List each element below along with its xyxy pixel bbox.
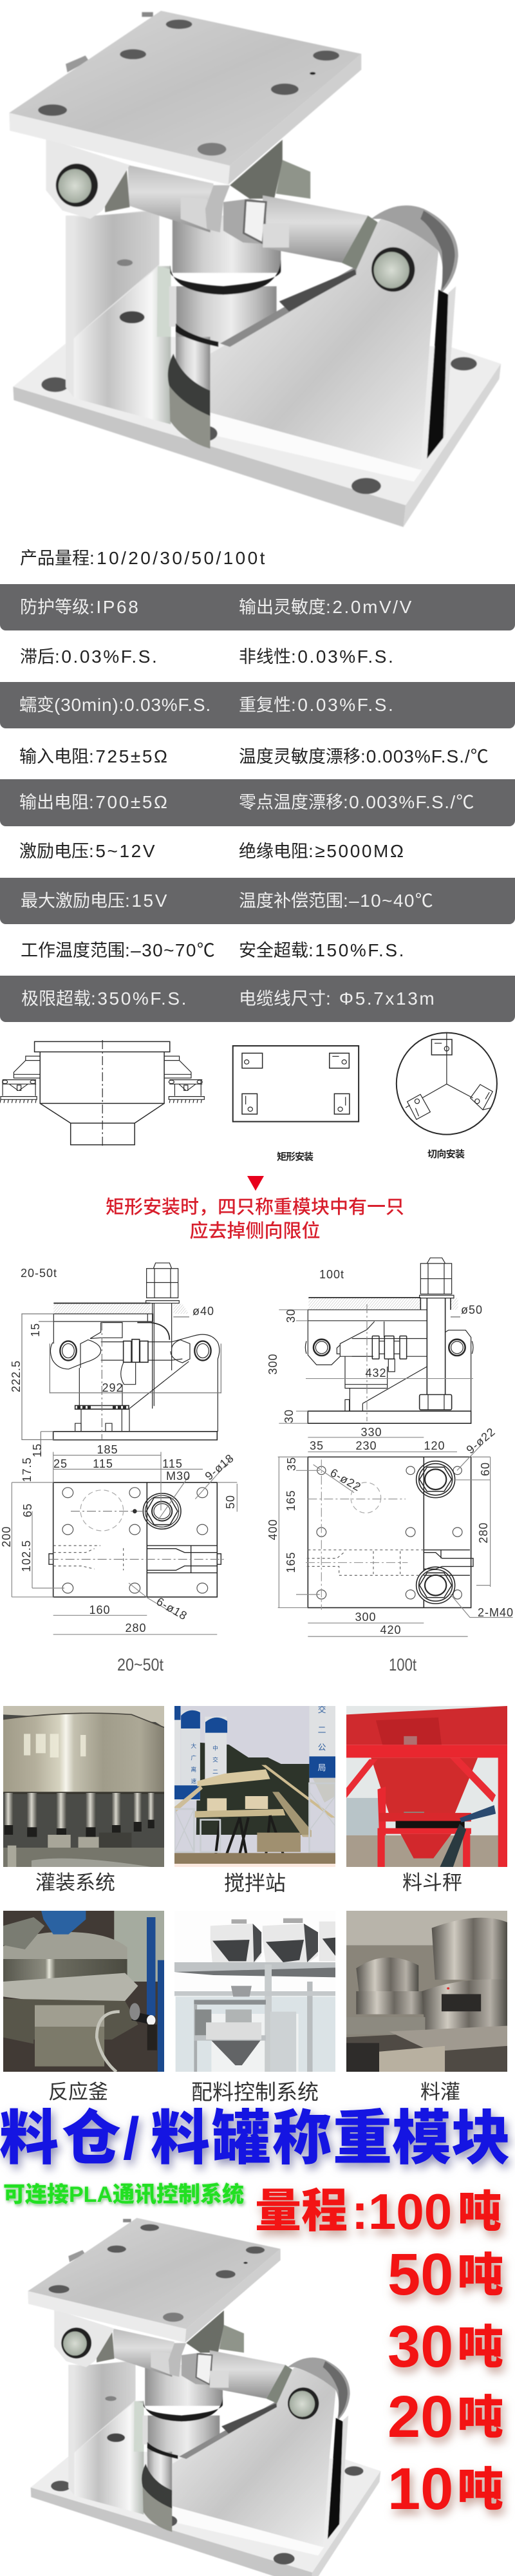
dimension values: 17.5 bbox=[21, 1457, 33, 1482]
dimension values: 300 bbox=[355, 1611, 377, 1624]
red installation note: 应去掉侧向限位 bbox=[189, 1220, 321, 1242]
photo: hopper scale bbox=[346, 1706, 507, 1867]
rectangular layout diagram bbox=[233, 1046, 359, 1122]
photo: mixing station bbox=[174, 1706, 335, 1867]
model label: 100t bbox=[319, 1268, 344, 1281]
capacity: 50 t: 吨 bbox=[457, 2250, 503, 2302]
dimension values: 292 bbox=[102, 1381, 124, 1394]
capacity: 10 t: 吨 bbox=[457, 2465, 503, 2516]
dimension values: 165 bbox=[285, 1490, 297, 1511]
label: hopper scale: 料斗秤 bbox=[402, 1871, 462, 1894]
label: reactor: 反应釜 bbox=[48, 2081, 108, 2103]
dimension values: ø40 bbox=[192, 1305, 214, 1318]
hero product photo: weighing module bbox=[9, 10, 501, 527]
dimension values: 280 bbox=[125, 1622, 147, 1634]
hopper diagram bbox=[0, 1040, 204, 1148]
label: tangential mounting: 切向安装 bbox=[427, 1149, 465, 1160]
dimension values: 222.5 bbox=[10, 1360, 23, 1392]
dimension values: 25 bbox=[53, 1457, 68, 1470]
capacity: 50 t: 50 bbox=[388, 2242, 453, 2307]
dimension values: 30 bbox=[285, 1309, 297, 1323]
photo: mixing station: 公 bbox=[318, 1742, 326, 1752]
dimension drawing: 20-50t bbox=[0, 1262, 238, 1634]
photo: mixing station: 二 bbox=[212, 1768, 218, 1775]
spec: protection: 防护等级:IP68 bbox=[20, 597, 140, 617]
dimension values: 9-ø18 bbox=[203, 1452, 236, 1482]
dimension values: 15 bbox=[31, 1443, 44, 1457]
dimension values: 2-M40 bbox=[478, 1606, 514, 1619]
dimension values: M30 bbox=[166, 1470, 191, 1482]
spec: repeatability: 重复性:0.03%F.S. bbox=[239, 695, 395, 715]
photo: filling system bbox=[3, 1706, 164, 1867]
spec: insulation: 绝缘电阻:≥5000MΩ bbox=[239, 841, 406, 861]
capacity: 100 t bbox=[255, 2183, 501, 2240]
icon: red down triangle bbox=[247, 1176, 264, 1191]
dimension values: 420 bbox=[380, 1624, 402, 1636]
spec: output resistance: 输出电阻:700±5Ω bbox=[19, 792, 169, 812]
label: batching control: 配料控制系统 bbox=[191, 2080, 319, 2104]
installation diagrams bbox=[0, 1032, 498, 1242]
spec: nonlinearity: 非线性:0.03%F.S. bbox=[239, 647, 395, 667]
dimension values bbox=[267, 1303, 514, 1636]
spec: cable: 电缆线尺寸: Φ5.7x13m bbox=[239, 989, 436, 1009]
spec: creep: 蠕变(30min):0.03%F.S. bbox=[19, 695, 211, 715]
label: tank: 料灌 bbox=[420, 2081, 460, 2103]
label: rectangular mounting: 矩形安装 bbox=[277, 1151, 314, 1162]
dimension values: 115 bbox=[162, 1457, 183, 1470]
red installation note: 矩形安装时，四只称重模块中有一只 bbox=[106, 1197, 404, 1218]
dimension values: 280 bbox=[477, 1522, 490, 1544]
capacity: 20 t: 吨 bbox=[457, 2392, 503, 2444]
dimension values: 60 bbox=[479, 1462, 492, 1476]
main title: 料仓/料罐称重模块 bbox=[0, 2106, 510, 2172]
capacity: 100 t: 量程 bbox=[255, 2186, 348, 2237]
spec: input resistance: 输入电阻:725±5Ω bbox=[19, 746, 169, 766]
photo: mixing station: 大 bbox=[191, 1742, 196, 1749]
capacity: 30 t bbox=[388, 2314, 503, 2380]
dimension values: 300 bbox=[267, 1353, 279, 1375]
dimension drawing: 100t bbox=[267, 1257, 514, 1637]
dimension values: 9-ø22 bbox=[464, 1425, 498, 1456]
capacity: 10 t bbox=[388, 2456, 503, 2522]
spec: zero temp drift: 零点温度漂移:0.003%F.S./℃ bbox=[239, 792, 475, 812]
spec: max excitation: 最大激励电压:15V bbox=[21, 891, 169, 911]
photo: tank bbox=[346, 1911, 507, 2072]
spec: ultimate overload: 极限超载:350%F.S. bbox=[21, 989, 188, 1009]
tangential layout diagram bbox=[397, 1032, 497, 1135]
photo: mixing station: 速 bbox=[191, 1778, 196, 1785]
dimension values: 160 bbox=[89, 1604, 111, 1616]
dimension values: 15 bbox=[29, 1323, 42, 1337]
dimension values: 230 bbox=[355, 1439, 377, 1452]
spec: compensation range: 温度补偿范围:–10~40℃ bbox=[239, 891, 434, 911]
photo: mixing station: 广 bbox=[191, 1754, 196, 1761]
capacity: 50 t bbox=[388, 2242, 503, 2307]
dimension values: 50 bbox=[224, 1495, 237, 1509]
dimension values: 165 bbox=[285, 1551, 297, 1573]
dimension values: 185 bbox=[97, 1443, 118, 1456]
capacity: 10 t: 10 bbox=[388, 2456, 453, 2522]
caption: 100t: 100t bbox=[389, 1655, 417, 1674]
dimension values bbox=[0, 1305, 237, 1634]
spec: hysteresis: 滞后:0.03%F.S. bbox=[20, 647, 158, 667]
spec: safe overload: 安全超载:150%F.S. bbox=[239, 940, 406, 960]
green subtitle: 可连接PLA通讯控制系统 bbox=[3, 2183, 244, 2207]
capacity: 30 t: 吨 bbox=[457, 2322, 503, 2374]
dimension values: 102.5 bbox=[20, 1540, 33, 1572]
photo: reactor bbox=[3, 1911, 164, 2072]
spec: sensitivity: 输出灵敏度:2.0mV/V bbox=[239, 597, 413, 617]
dimension values: 30 bbox=[283, 1409, 295, 1423]
spec: temp sensitivity drift: 温度灵敏度漂移:0.003%F.S./℃ bbox=[239, 746, 489, 766]
dimension values: 35 bbox=[310, 1439, 324, 1452]
bottom product photo bbox=[28, 2218, 381, 2576]
capacity: 30 t: 30 bbox=[388, 2314, 453, 2380]
capacity list bbox=[255, 2183, 510, 2522]
spec: working temp: 工作温度范围:–30~70℃ bbox=[21, 940, 216, 960]
dimension values: 6-ø22 bbox=[328, 1466, 364, 1494]
model label: 20-50t bbox=[21, 1267, 57, 1280]
dimension values: 330 bbox=[360, 1426, 382, 1439]
photo: mixing station: 离 bbox=[191, 1766, 196, 1773]
caption: 20~50t: 20~50t bbox=[117, 1655, 164, 1674]
dimension values: 432 bbox=[365, 1367, 387, 1379]
photo: mixing station: 局 bbox=[318, 1763, 326, 1772]
red installation note bbox=[106, 1197, 404, 1242]
spec: excitation: 激励电压:5~12V bbox=[19, 841, 156, 861]
dimension values: 35 bbox=[285, 1457, 298, 1471]
photo: mixing station: 二 bbox=[318, 1725, 326, 1735]
label: mixing station: 搅拌站 bbox=[224, 1871, 286, 1895]
capacity: 100 t: :100 bbox=[351, 2183, 452, 2240]
photo: mixing station: 交 bbox=[212, 1756, 218, 1763]
photo: batching control system bbox=[174, 1918, 335, 2072]
capacity: 20 t bbox=[388, 2384, 503, 2450]
spec: range: 产品量程:10/20/30/50/100t bbox=[20, 548, 267, 568]
dimension values: 6-ø18 bbox=[154, 1595, 190, 1623]
dimension values: 400 bbox=[267, 1519, 279, 1540]
label: filling system: 灌装系统 bbox=[35, 1871, 115, 1894]
dimension values: 120 bbox=[424, 1439, 445, 1452]
row stripes bbox=[0, 584, 515, 1022]
dimension values: 65 bbox=[21, 1503, 34, 1517]
photo: mixing station: 中 bbox=[212, 1744, 218, 1751]
dimension values: 200 bbox=[0, 1526, 13, 1548]
capacity: 100 t: 吨 bbox=[458, 2188, 501, 2237]
dimension values: 115 bbox=[93, 1457, 113, 1470]
spec table bbox=[0, 548, 515, 1022]
drawing captions bbox=[117, 1655, 417, 1674]
capacity: 20 t: 20 bbox=[388, 2384, 453, 2450]
dimension values: ø50 bbox=[461, 1303, 483, 1316]
